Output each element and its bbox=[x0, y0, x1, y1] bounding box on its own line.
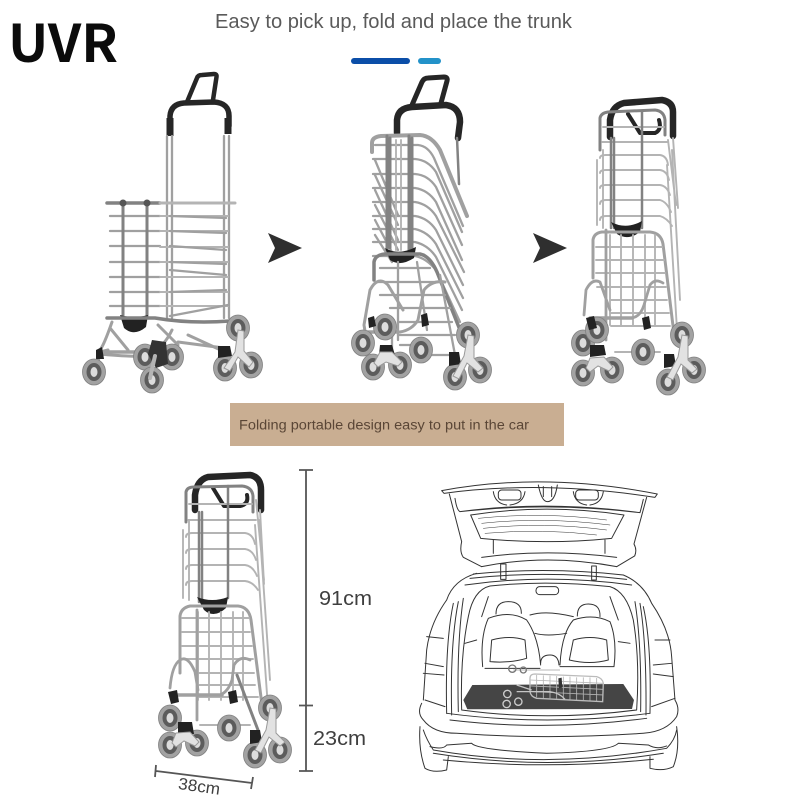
trunk floor mat bbox=[463, 684, 634, 709]
seats bbox=[465, 597, 630, 668]
dimension: 91cm and 23cm height lines bbox=[299, 470, 372, 771]
tailgate bbox=[442, 482, 657, 567]
brand title: UVR: UVR bbox=[8, 2, 118, 77]
cart: unfolded bbox=[82, 74, 262, 393]
dimension: 91cm and 23cm height lines: 91cm bbox=[319, 588, 372, 610]
cart: half folded bbox=[352, 77, 492, 390]
car body bbox=[420, 571, 678, 771]
arrow: step two to three bbox=[533, 233, 567, 263]
heading: Easy to pick up, fold and place the trunk bbox=[215, 11, 573, 33]
cart: fully folded bbox=[572, 100, 706, 395]
dimension: 38cm width line bbox=[155, 765, 253, 799]
banner: caption: Folding portable design easy to put in the car bbox=[239, 418, 530, 432]
banner: caption bbox=[230, 403, 564, 446]
rear mirror bbox=[536, 587, 559, 595]
folded cart in trunk bbox=[503, 665, 603, 708]
cart: dimensions view bbox=[158, 475, 292, 768]
car rear illustration with cart in trunk bbox=[420, 482, 678, 771]
dimension: 38cm width line: 38cm bbox=[177, 775, 221, 799]
accent bars bbox=[351, 58, 441, 64]
struts bbox=[501, 564, 596, 580]
arrow: step one to two bbox=[268, 233, 302, 263]
dimension: 91cm and 23cm height lines: 23cm bbox=[313, 728, 366, 750]
